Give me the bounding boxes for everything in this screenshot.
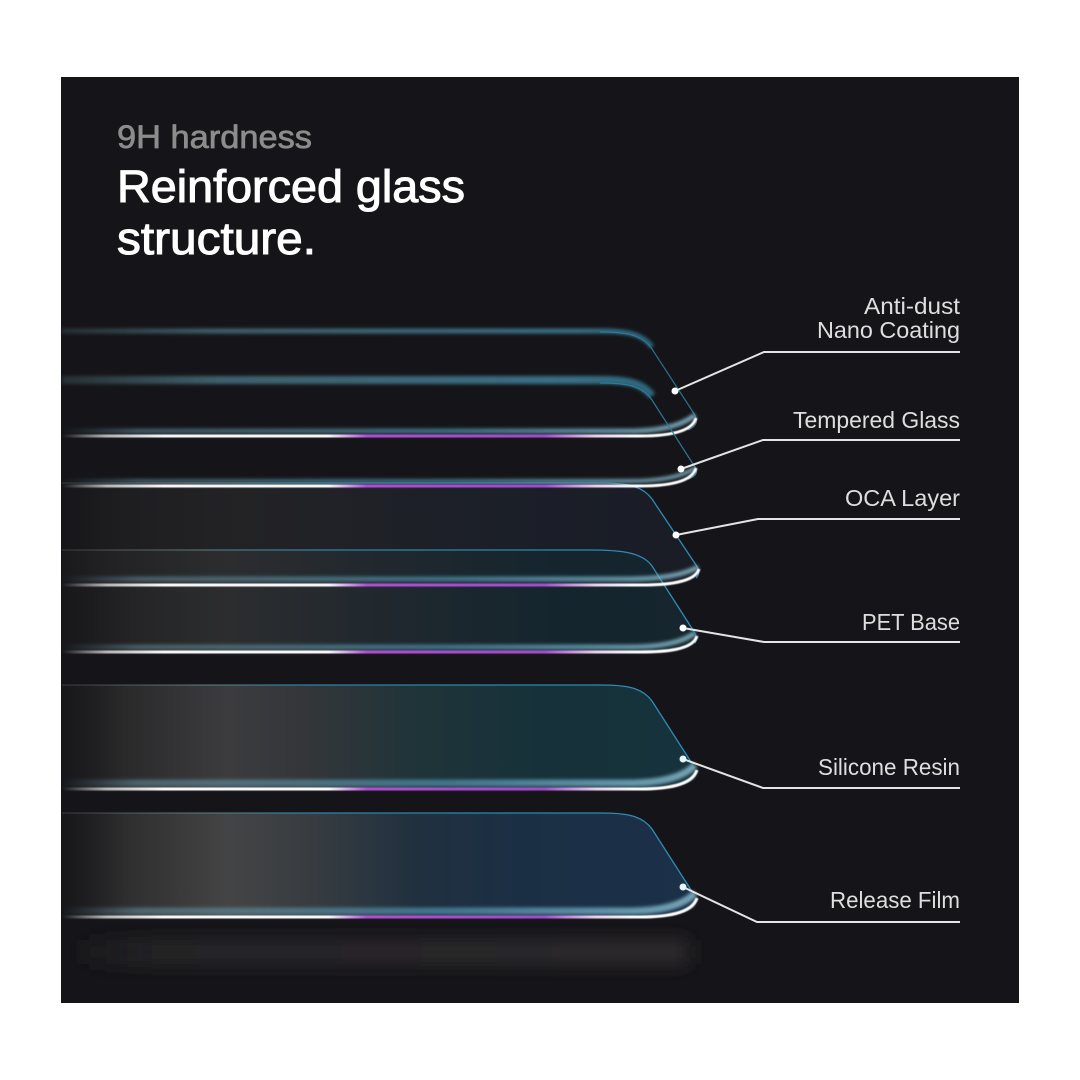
callout: PET base: [680, 609, 960, 642]
callout: anti-dust nano coating: Anti-dust: [864, 293, 961, 319]
title: Reinforced glass structure: Reinforced glass: [117, 161, 465, 212]
edge: OCA layer lower edge: [62, 567, 699, 585]
layer: PET base: [62, 550, 697, 652]
layer: silicone resin: [62, 685, 697, 789]
callout: anti-dust nano coating: Nano Coating: [817, 317, 960, 343]
callout: anti-dust nano coating: [672, 293, 961, 394]
panel: dark background: [61, 77, 1019, 1003]
callout: release film: [680, 884, 960, 922]
callout: release film: Release Film: [830, 887, 960, 913]
callout: silicone resin: Silicone Resin: [818, 754, 960, 780]
callout: OCA layer: OCA Layer: [845, 485, 960, 511]
title: 9H hardness: 9H hardness: [117, 119, 312, 155]
title: Reinforced glass structure: structure.: [117, 213, 316, 264]
layer: tempered glass: [62, 380, 696, 479]
title: Reinforced glass structure: [117, 161, 465, 264]
callout: silicone resin: [680, 754, 960, 788]
layer: release film: [62, 813, 697, 917]
layer: OCA layer: [62, 483, 699, 585]
callout: tempered glass: [678, 407, 960, 472]
edge: tempered glass lower edge: [62, 468, 696, 486]
layer: anti-dust nano coating: [62, 331, 696, 436]
callout: PET base: PET Base: [862, 609, 960, 635]
callout: OCA layer: [672, 485, 960, 538]
stack shadow reflection: [80, 940, 690, 964]
callout: tempered glass: Tempered Glass: [793, 407, 960, 433]
